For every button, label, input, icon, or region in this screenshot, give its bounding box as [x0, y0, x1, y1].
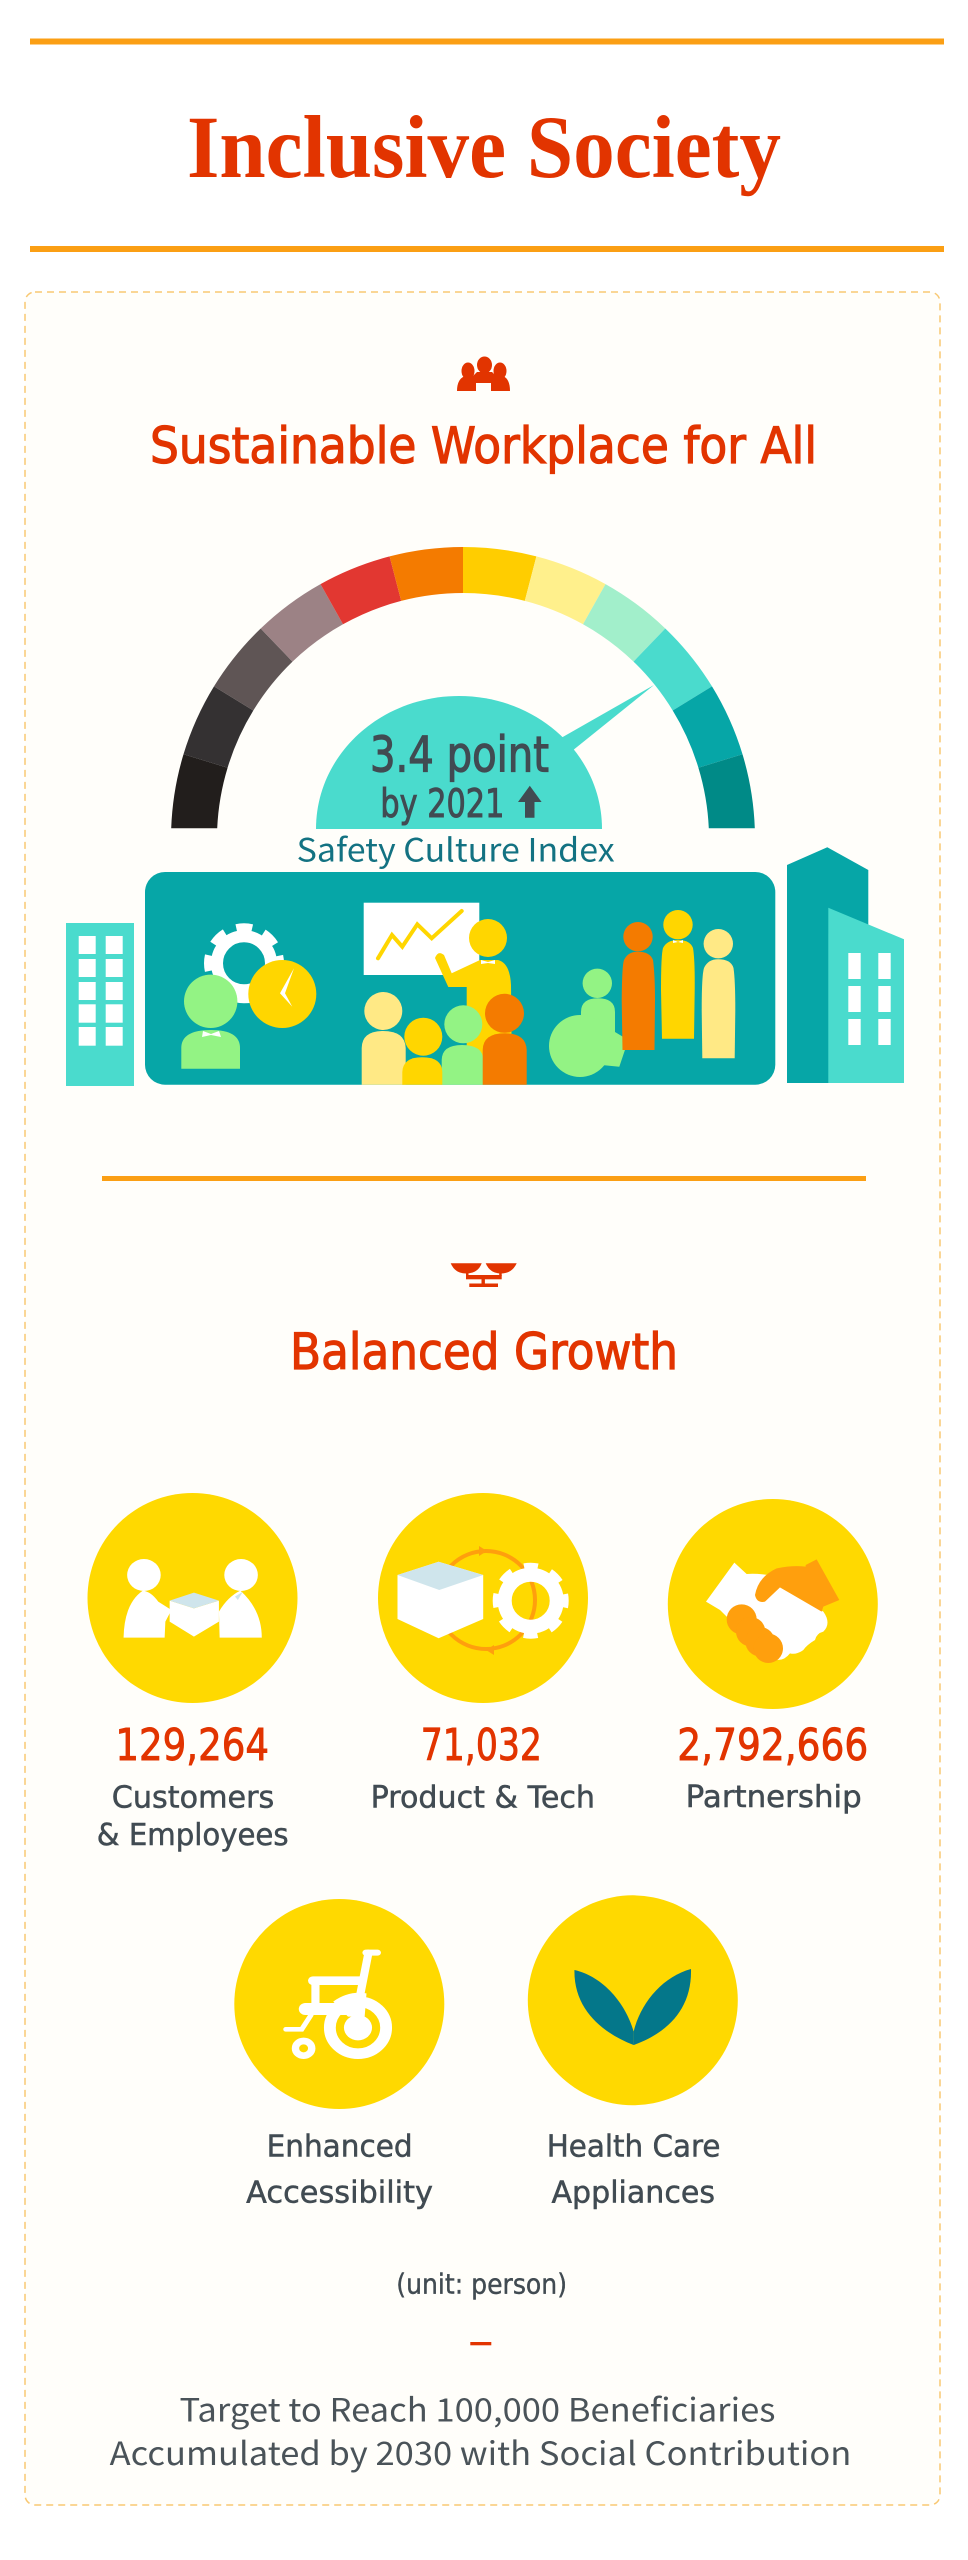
gauge label: Safety Culture Index — [297, 826, 615, 872]
audience group — [362, 992, 527, 1085]
icon: leaf — [528, 1895, 738, 2105]
gauge needle and dome — [316, 685, 654, 829]
item: health care appliances — [528, 1895, 738, 2210]
number: 71,032 — [421, 1720, 542, 1771]
number: 2,792,666 — [677, 1720, 868, 1771]
label: Appliances — [552, 2175, 715, 2210]
label: Customers — [112, 1780, 274, 1815]
label: Accessibility — [246, 2175, 433, 2210]
label — [97, 1780, 289, 1853]
icon: up arrow — [518, 786, 542, 818]
person: pale yellow standing — [702, 929, 735, 1058]
icon: people — [457, 356, 510, 391]
label: Enhanced — [267, 2130, 413, 2165]
heading: sustainable workplace: Sustainable Workplace for All — [150, 417, 817, 475]
label — [547, 2130, 720, 2210]
icon: box and gear cycle — [378, 1493, 588, 1703]
unit note: (unit: person) — [396, 2267, 567, 2300]
person: presenter — [435, 919, 512, 1084]
label: & Employees — [97, 1818, 289, 1853]
right building — [787, 847, 904, 1083]
person: orange standing — [622, 922, 655, 1050]
title: Inclusive Society — [187, 99, 781, 197]
number: 129,264 — [115, 1720, 269, 1771]
person: wheelchair user — [549, 969, 628, 1077]
person: green worker — [181, 975, 240, 1069]
icon: clock — [248, 960, 316, 1028]
icon: balance scale — [451, 1263, 517, 1287]
presentation board — [364, 903, 479, 975]
workplace room — [145, 872, 775, 1085]
target statement: Accumulated by 2030 with Social Contribution — [110, 2429, 851, 2475]
target statement: Target to Reach 100,000 Beneficiaries — [180, 2386, 775, 2432]
heading: balanced growth: Balanced Growth — [290, 1323, 678, 1381]
score: 3.4 point: 3.4 point — [370, 727, 549, 784]
label — [246, 2130, 433, 2210]
icon: wheelchair — [234, 1899, 444, 2109]
item: product and tech — [371, 1493, 595, 1815]
item: partnership — [668, 1499, 878, 1815]
label: Product & Tech — [371, 1780, 595, 1815]
target statement — [110, 2386, 851, 2475]
gauge arc — [171, 547, 755, 828]
score: by 2021: by 2021 — [380, 782, 504, 827]
left building — [66, 923, 134, 1086]
icon: gear — [208, 927, 280, 999]
item: enhanced accessibility — [234, 1899, 444, 2210]
person: yellow standing — [661, 910, 695, 1039]
label: Partnership — [686, 1780, 862, 1815]
icon: customers handing box — [88, 1493, 298, 1703]
label: Health Care — [547, 2130, 720, 2165]
icon: handshake — [668, 1499, 878, 1709]
item: customers and employees — [88, 1493, 298, 1853]
